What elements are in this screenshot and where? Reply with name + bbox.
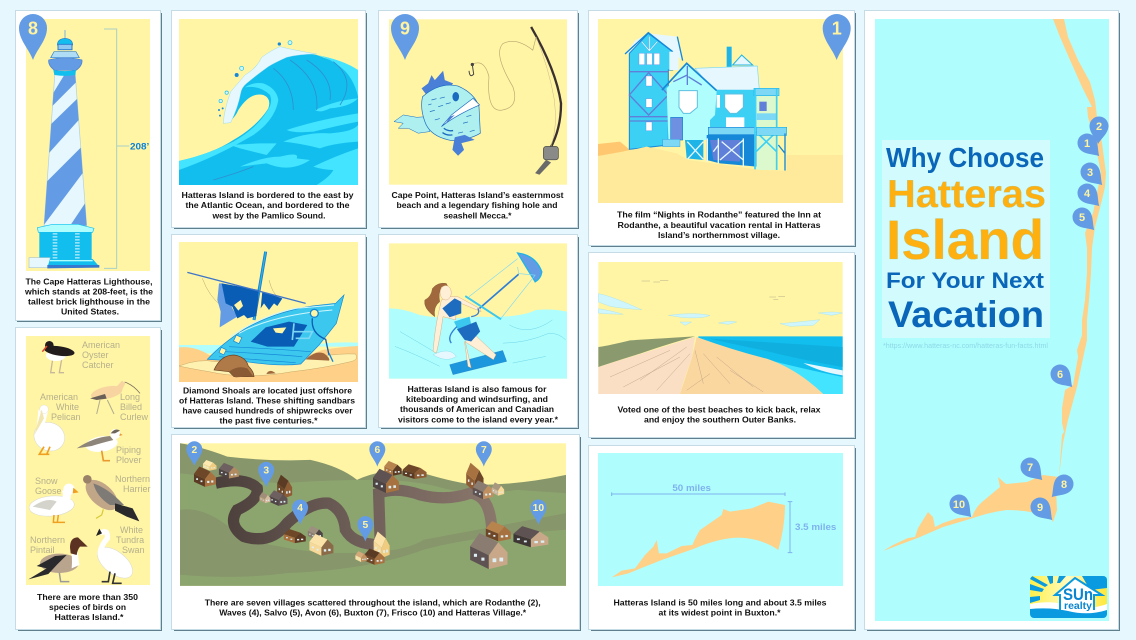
caption: wave: Hatteras Island is bordered to the east by <box>182 190 354 200</box>
map pins: 5 <box>1079 212 1085 224</box>
kiteboarder illustration <box>389 243 567 379</box>
caption: inn: Rodanthe, a beautiful vacation rental in Hatteras <box>618 220 821 230</box>
caption: villages: There are seven villages scattered throughout the island, which are Rodanthe (2), <box>205 598 541 608</box>
bird labels: Billed <box>120 402 142 412</box>
oystercatcher <box>42 341 75 373</box>
caption: villages: Waves (4), Salvo (5), Avon (6), Buxton (7), Frisco (10) and Hatteras Village.* <box>219 608 527 618</box>
bird labels: Piping <box>116 445 141 455</box>
caption: lighthouse: which stands at 208-feet, is the <box>24 286 153 296</box>
island size map <box>598 453 843 586</box>
caption: fishing <box>392 190 564 220</box>
pin: 9: 9 <box>400 18 410 38</box>
panel: map and title <box>864 10 1120 631</box>
pins 2 3 4 5 6 7 10: 5 <box>362 520 368 531</box>
bird labels: Swan <box>122 545 145 555</box>
beach illustration <box>598 262 843 394</box>
title block: Island <box>886 208 1044 271</box>
caption: birds <box>37 592 138 622</box>
bird labels: Goose <box>35 486 62 496</box>
bird labels: Snow <box>35 476 58 486</box>
pins 2 3 4 5 6 7 10: 2 <box>191 445 197 456</box>
title block: Hatteras <box>887 173 1046 216</box>
caption: lighthouse: tallest brick lighthouse in the <box>28 296 150 306</box>
caption: island size: Hatteras Island is 50 miles long and about 3.5 miles <box>614 598 827 608</box>
bird illustrations <box>26 336 150 585</box>
map pins: 9 <box>1037 502 1043 514</box>
caption: fishing: Cape Point, Hatteras Island’s easternmost <box>392 190 564 200</box>
footnote: *https://www.hatteras-nc.com/hatteras-fun-facts.html <box>883 341 1048 350</box>
logo: Sun Realty <box>1030 576 1107 618</box>
map pins: 8 <box>1061 479 1067 491</box>
map pins: 1 <box>1084 138 1090 150</box>
bird labels: Harrier <box>123 484 151 494</box>
pins 2 3 4 5 6 7 10: 10 <box>533 503 544 514</box>
caption: kiteboarding: thousands of American and Canadian <box>400 404 554 414</box>
panel: kiteboarding <box>378 234 579 429</box>
island size map: 50 miles <box>672 483 711 493</box>
map: Hatteras Island outline <box>883 19 1106 551</box>
bird labels: Catcher <box>82 360 114 370</box>
pins 2 3 4 5 6 7 10: 7 <box>481 445 487 456</box>
goose <box>28 484 79 522</box>
panel: beach <box>588 252 856 439</box>
caption: birds: Hatteras Island.* <box>54 612 124 622</box>
caption: wave <box>182 190 354 220</box>
caption: wave: the Atlantic Ocean, and bordered to the <box>186 200 350 210</box>
map pins: 7 <box>1027 462 1033 474</box>
map pins: 10 <box>953 499 965 511</box>
logo: Sun Realty: SUn <box>1063 585 1093 604</box>
caption: kiteboarding: Hatteras Island is also famous for <box>408 384 547 394</box>
curlew <box>90 381 140 414</box>
caption: inn: Island’s northernmost village. <box>658 230 780 240</box>
caption: island size: at its widest point in Buxton.* <box>658 608 781 618</box>
caption: beach <box>618 404 821 425</box>
caption: shipwreck <box>179 386 355 426</box>
bird labels: Northern <box>115 474 150 484</box>
fish and rod illustration <box>389 19 567 185</box>
bird labels: Northern <box>30 535 65 545</box>
map pins: 4 <box>1084 188 1091 200</box>
pins 2 3 4 5 6 7 10: 6 <box>374 445 380 456</box>
bird labels: Plover <box>116 455 142 465</box>
caption: birds: There are more than 350 <box>37 592 138 602</box>
pins 2 3 4 5 6 7 10 <box>186 441 546 541</box>
panel: lighthouse <box>16 10 162 322</box>
panel: inn at Rodanthe <box>588 10 856 247</box>
caption: villages <box>205 598 541 618</box>
caption: kiteboarding: kiteboarding and windsurfing, and <box>406 394 548 404</box>
swan <box>92 529 138 584</box>
pin: 8: 8 <box>28 18 38 38</box>
caption: inn: The film “Nights in Rodanthe” featured the Inn at <box>617 210 821 220</box>
caption: lighthouse: The Cape Hatteras Lighthouse, <box>26 276 152 286</box>
caption: shipwreck: the past five centuries.* <box>220 416 318 426</box>
map pins <box>946 116 1109 527</box>
lighthouse illustration: 208’ <box>130 141 149 151</box>
pelican <box>29 405 69 456</box>
pin: 8 <box>19 14 47 60</box>
bird labels: Pelican <box>51 412 81 422</box>
logo: Sun Realty: realty <box>1064 601 1092 612</box>
caption: kiteboarding: visitors come to the island every year.* <box>398 414 559 424</box>
caption: kiteboarding <box>398 384 559 424</box>
title block <box>882 140 1050 338</box>
bird labels: White <box>120 525 143 535</box>
bird labels: Tundra <box>116 535 144 545</box>
wave illustration <box>179 19 358 185</box>
map pins: 3 <box>1087 167 1093 179</box>
panel: birds <box>16 328 162 631</box>
island size map: 3.5 miles <box>795 522 836 532</box>
bird labels: Pintail <box>30 545 55 555</box>
shipwreck illustration <box>179 242 358 382</box>
caption: lighthouse: United States. <box>61 306 119 316</box>
map pins: 2 <box>1096 121 1102 133</box>
panel: shipwreck <box>172 234 367 429</box>
title block: For Your Next <box>886 268 1045 293</box>
caption: shipwreck: of Hatteras Island. These shifting sandbars <box>179 396 355 406</box>
caption: shipwreck: have caused hundreds of shipwrecks over <box>182 406 353 416</box>
caption: birds: species of birds on <box>49 602 126 612</box>
caption: inn <box>617 210 821 240</box>
pintail <box>28 537 88 582</box>
caption: beach: and enjoy the southern Outer Banks. <box>644 415 796 425</box>
plover <box>77 429 123 461</box>
title block: Vacation <box>888 294 1044 335</box>
caption: island size <box>614 598 827 618</box>
pin: 1: 1 <box>832 18 842 38</box>
panel: island size <box>588 446 856 631</box>
pins 2 3 4 5 6 7 10: 4 <box>297 503 303 514</box>
caption: lighthouse <box>24 276 153 316</box>
bird labels: Oyster <box>82 350 109 360</box>
village map illustration <box>180 441 566 586</box>
panel: wave <box>172 10 367 229</box>
pins 2 3 4 5 6 7 10: 3 <box>263 466 269 477</box>
caption: shipwreck: Diamond Shoals are located just offshore <box>183 386 352 396</box>
bird labels: American <box>82 340 120 350</box>
panel: villages <box>172 434 581 631</box>
title block: Why Choose <box>886 142 1044 173</box>
pin: 1 <box>823 14 851 60</box>
harrier <box>80 474 139 521</box>
caption: fishing: beach and a legendary fishing hole and <box>396 200 558 210</box>
inn illustration <box>598 19 843 203</box>
bird labels: Curlew <box>120 412 149 422</box>
map pins: 6 <box>1057 369 1063 381</box>
bird labels: Long <box>120 392 140 402</box>
bird labels <box>30 340 151 555</box>
caption: wave: west by the Pamlico Sound. <box>212 210 326 220</box>
caption: beach: Voted one of the best beaches to kick back, relax <box>618 404 821 414</box>
bird labels: American <box>40 392 78 402</box>
pin: 9 <box>391 14 419 60</box>
bird labels: White <box>56 402 79 412</box>
panel: fishing <box>378 10 579 229</box>
houses <box>194 460 548 569</box>
caption: fishing: seashell Mecca.* <box>444 210 512 220</box>
lighthouse illustration <box>26 19 150 271</box>
